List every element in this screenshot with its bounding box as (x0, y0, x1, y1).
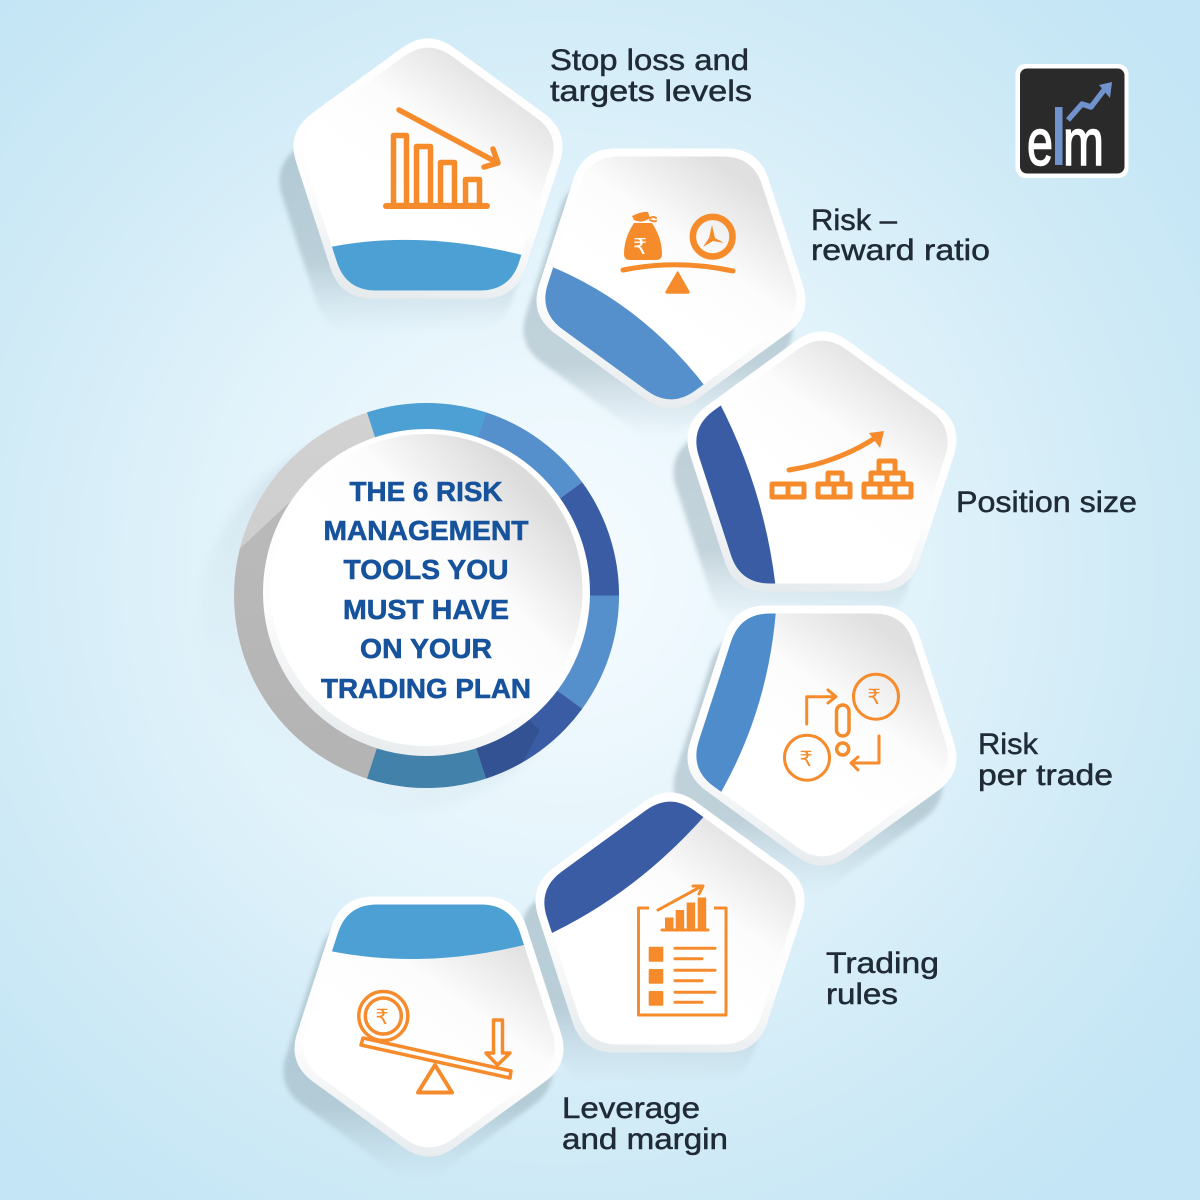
label: position size: Position size (956, 486, 1137, 519)
title: TOOLS YOU (344, 554, 508, 585)
label: risk reward: Risk – (811, 204, 897, 237)
panel: risk reward pentagon (536, 148, 806, 408)
icon: falling bar chart (386, 110, 498, 206)
icon: rupee exchange: ₹ (799, 748, 813, 771)
icon: rupee exchange (784, 674, 898, 780)
pentagon drop shadows (279, 72, 943, 1180)
label: leverage and margin: and margin (562, 1123, 728, 1156)
label: stop loss: targets levels (550, 75, 752, 108)
central disc with title (263, 429, 590, 756)
central segmented ring (230, 403, 619, 800)
logo: elm: e (1027, 105, 1053, 179)
label: risk per trade: per trade (978, 759, 1113, 792)
icon: seesaw with coin: ₹ (375, 1006, 389, 1029)
title: ON YOUR (360, 633, 492, 664)
label: risk per trade: Risk (978, 728, 1039, 761)
icon: clipboard with chart (638, 886, 726, 1015)
panel: trading rules pentagon (520, 780, 805, 1052)
panel: risk per trade pentagon (680, 606, 957, 866)
title (321, 476, 531, 704)
label: trading rules: rules (826, 978, 898, 1011)
label: leverage and margin: Leverage (562, 1092, 700, 1125)
panel: position size pentagon (680, 331, 957, 592)
icon: rupee exchange: ₹ (867, 686, 881, 709)
title: MANAGEMENT (324, 515, 529, 546)
title: TRADING PLAN (321, 673, 531, 704)
label: risk reward: reward ratio (811, 234, 990, 267)
panel: leverage and margin pentagon (294, 890, 564, 1157)
panel: stop loss pentagon (293, 38, 563, 310)
icon: balance with money bag and clock (623, 212, 733, 293)
central ring shadow (200, 430, 584, 814)
title: MUST HAVE (343, 594, 509, 625)
logo: elm (1016, 64, 1128, 179)
icon: seesaw with coin (359, 992, 511, 1092)
icon: stacked bricks with arrow (772, 431, 911, 497)
label: trading rules: Trading (826, 947, 939, 980)
title: THE 6 RISK (350, 476, 503, 507)
logo: elm: m (1063, 105, 1104, 179)
label: stop loss: Stop loss and (550, 44, 749, 77)
icon: balance with money bag and clock: ₹ (633, 234, 647, 259)
